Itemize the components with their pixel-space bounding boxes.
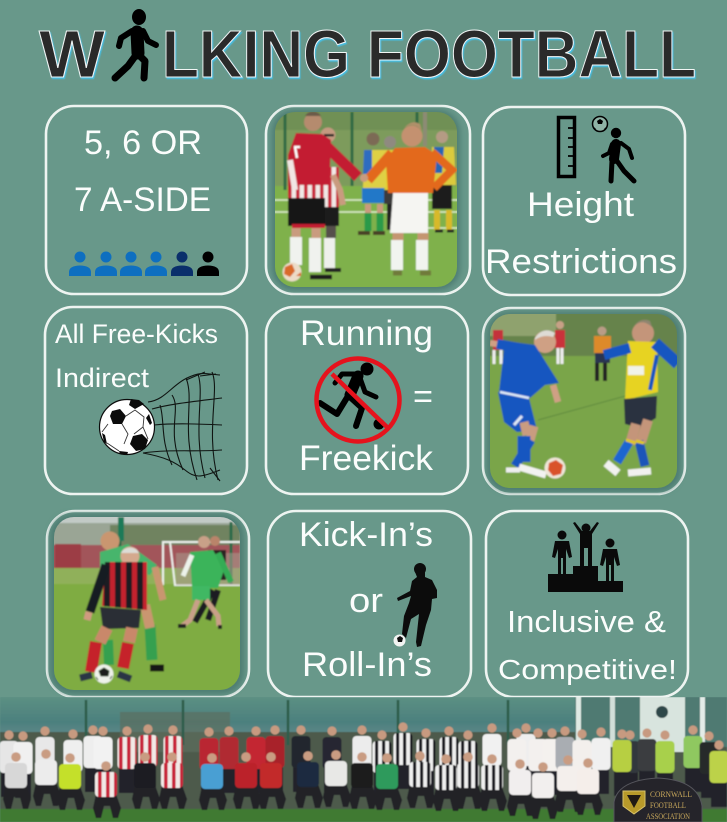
icon: no running sign (316, 358, 400, 442)
player in red number 7 (304, 113, 322, 131)
icon: walking figure (115, 9, 156, 78)
player in red and black (120, 546, 140, 566)
player in sunglasses (320, 128, 336, 142)
icon: player silhouette (394, 563, 437, 647)
text: roll-in's: Roll-In’s (302, 646, 432, 684)
panel: inclusive and competitive (486, 511, 688, 697)
back players (436, 131, 448, 143)
match ball (282, 262, 302, 282)
banner: Cornwall Football Association: ASSOCIATION (646, 811, 690, 821)
player in orange (402, 126, 422, 146)
icon: podium with three figures (548, 522, 623, 592)
photo: player shields the ball (50, 515, 244, 694)
match ball (94, 664, 114, 684)
back players (210, 536, 220, 546)
panel: photo handshake (266, 106, 470, 294)
panel: height restrictions (483, 107, 685, 295)
text: inclusive &: Inclusive & (507, 604, 666, 639)
panel: running rule (266, 307, 468, 494)
match ball (544, 458, 566, 478)
distant players (556, 321, 564, 329)
icon: walking player (603, 128, 634, 181)
banner: Cornwall Football Association (614, 778, 702, 822)
text: equals: = (413, 378, 433, 416)
photo: group of players at the bottom (0, 697, 727, 822)
text: competitive!: Competitive! (498, 654, 677, 685)
text: kick-in's: Kick-In’s (299, 516, 433, 554)
title text: W (39, 17, 106, 92)
player behind in green (100, 532, 120, 550)
icon: football in net (100, 399, 154, 455)
panel: indirect free-kicks (45, 307, 247, 494)
title (39, 9, 696, 92)
text: height: Height (527, 186, 635, 224)
panel: photo tackle (483, 308, 685, 494)
banner: Cornwall Football Association: CORNWALL (650, 789, 692, 799)
icon: football (592, 116, 608, 132)
text: running: Running (300, 314, 433, 353)
icon: ruler (558, 118, 574, 176)
heading: 7 a-side: 7 A-SIDE (74, 181, 211, 219)
player in blue (534, 331, 556, 353)
icon: six players (69, 252, 219, 276)
back row players (0, 730, 18, 797)
panel: photo shielding ball (47, 511, 249, 697)
icon: net (143, 372, 222, 481)
panel: team size (46, 106, 247, 294)
heading: 5, 6 or: 5, 6 OR (84, 124, 202, 162)
text: indirect: Indirect (55, 363, 150, 393)
text: all free-kicks: All Free-Kicks (55, 319, 218, 349)
text: restrictions: Restrictions (485, 243, 677, 281)
text: freekick: Freekick (299, 439, 433, 478)
banner: Cornwall Football Association: FOOTBALL (650, 800, 686, 810)
photo: two captains shaking hands (270, 108, 462, 291)
panel: kick-ins or roll-ins (268, 511, 471, 697)
photo: two players contest the ball (486, 310, 682, 492)
text: or: or (349, 582, 383, 620)
player in yellow (632, 322, 654, 344)
front row players (3, 752, 31, 809)
